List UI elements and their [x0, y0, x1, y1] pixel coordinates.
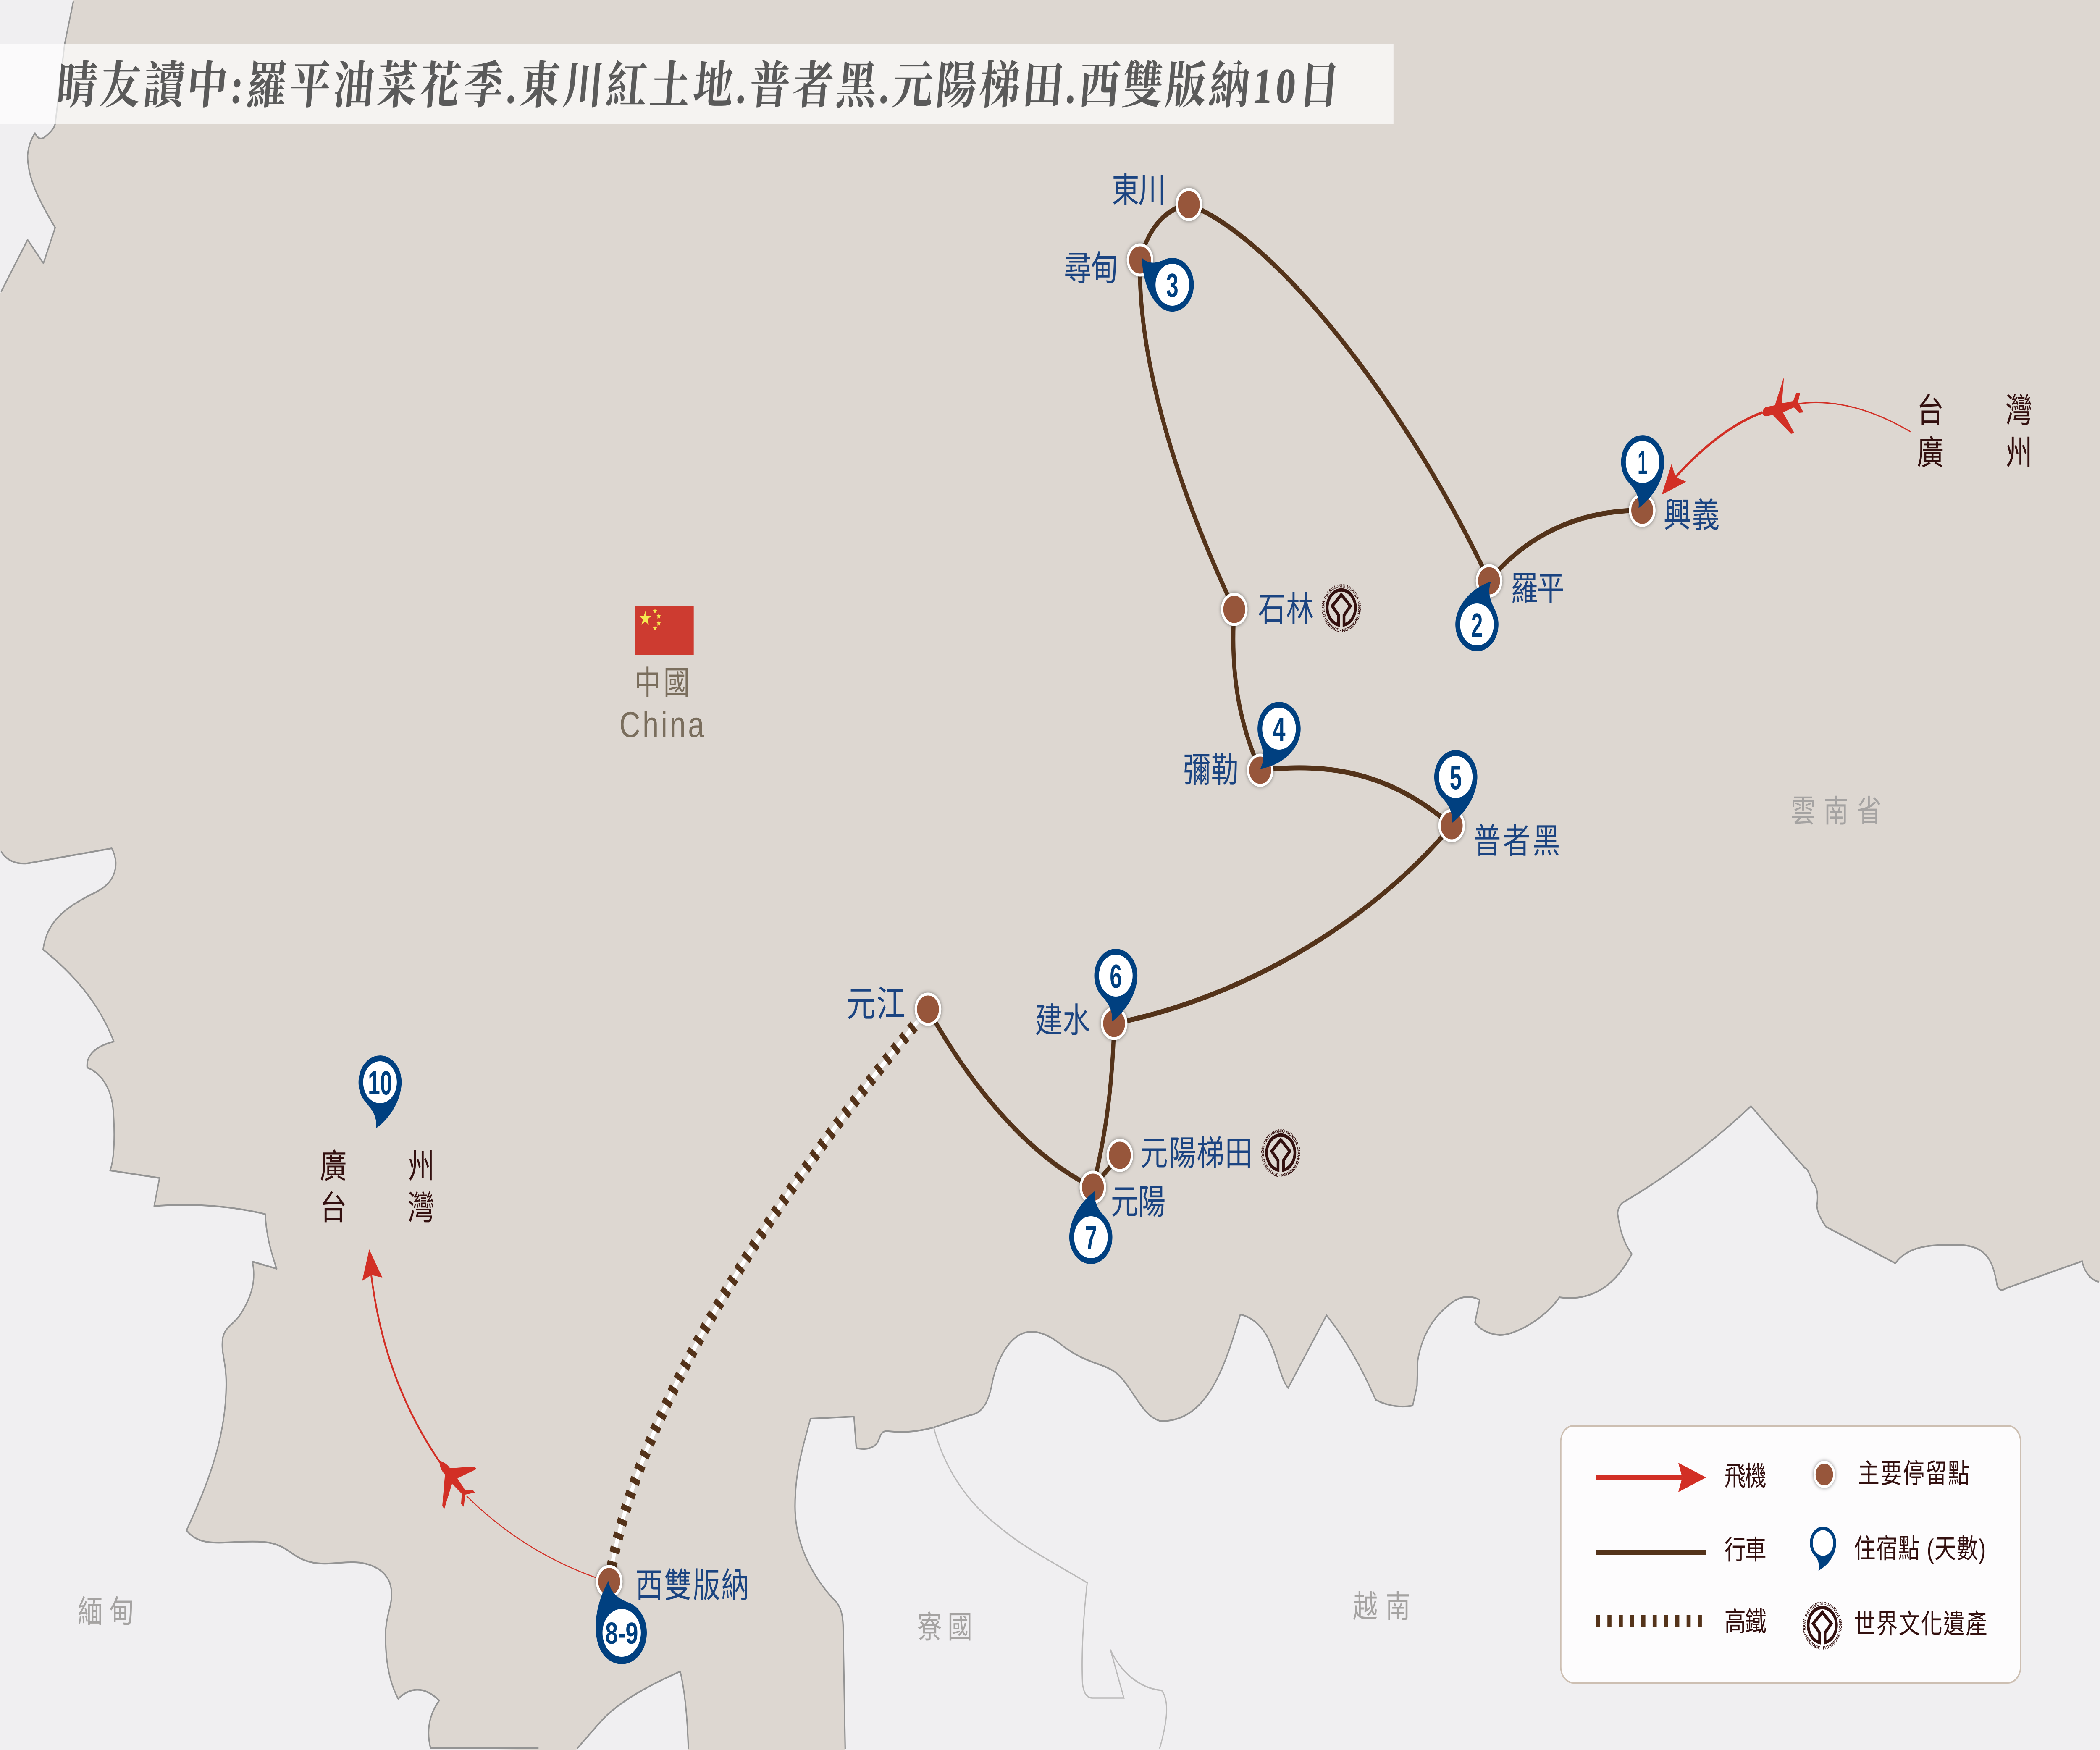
label: Stone Forest: 石林 — [1258, 590, 1314, 629]
label: China in Chinese: 中國 — [635, 664, 690, 701]
label: Mile: 彌勒 — [1183, 751, 1239, 790]
panel: legend — [1561, 1426, 2021, 1683]
icon: world heritage, Yuanyang Terraces: PATRIMONIO MUNDIAL — [1263, 1128, 1299, 1154]
pin: night 2: 2 — [1471, 606, 1483, 644]
country label: Laos: 寮國 — [917, 1610, 972, 1645]
label: return Taiwan: 台灣 — [320, 1189, 435, 1227]
pin: night 6 — [1095, 949, 1137, 1022]
pin: night 1: 1 — [1638, 444, 1648, 482]
pin: night 4 — [1244, 693, 1307, 782]
legend: stop node — [1814, 1462, 1834, 1487]
label: Xishuangbanna: 西雙版納 — [635, 1566, 749, 1605]
country label: Yunnan: 雲南省 — [1791, 794, 1882, 829]
label: Yuanyang: 元陽 — [1111, 1183, 1166, 1221]
legend text: flight: 飛機 — [1725, 1462, 1767, 1491]
route: high-speed rail line — [609, 1009, 928, 1582]
pin: night 5 — [1434, 750, 1478, 823]
pin: night 10 — [359, 1055, 402, 1128]
pin: night 7: 7 — [1085, 1219, 1097, 1257]
label: China in English: China — [620, 704, 704, 745]
pin: night 3: 3 — [1166, 267, 1179, 304]
pin: night 3 — [1129, 239, 1202, 321]
label: Dongchuan: 東川 — [1112, 171, 1166, 210]
legend: world heritage icon: WORLD HERITAGE · PATRIMOINE MONDIAL — [1802, 1618, 1843, 1651]
icon: flag stars — [640, 609, 661, 631]
legend: rail bars — [1596, 1615, 1702, 1627]
title: 晴友讀中:羅平油菜花季.東川紅土地.普者黑.元陽梯田.西雙版納10日 — [55, 58, 1342, 114]
icon: world heritage, Stone Forest — [1320, 583, 1362, 633]
label: Yuanyang Terraces: 元陽梯田 — [1140, 1134, 1252, 1173]
country label: Myanmar: 緬甸 — [78, 1595, 134, 1629]
pin: night 1 — [1621, 435, 1664, 508]
legend text: main stop: 主要停留點 — [1858, 1459, 1969, 1489]
country label: Vietnam: 越南 — [1353, 1590, 1410, 1624]
legend: drive line — [1596, 1550, 1706, 1555]
legend: flight arrow — [1596, 1463, 1706, 1492]
legend: overnight pin — [1810, 1527, 1836, 1571]
label: departure Guangzhou: 廣州 — [1917, 434, 2032, 472]
route: driving lines — [928, 205, 1642, 1187]
icon: arrow head — [362, 1249, 382, 1281]
legend text: drive: 行車 — [1725, 1536, 1767, 1565]
label: Luoping: 羅平 — [1511, 569, 1564, 608]
legend text: world heritage: 世界文化遺產 — [1854, 1610, 1987, 1639]
label: return Guangzhou: 廣州 — [320, 1148, 435, 1186]
pin: night 10: 10 — [368, 1064, 392, 1102]
pin: nights 8-9 — [581, 1571, 655, 1674]
legend text: rail: 高鐵 — [1725, 1608, 1767, 1637]
legend: world heritage icon: PATRIMONIO MUNDIAL — [1804, 1601, 1840, 1627]
icon: plane — [440, 1461, 477, 1509]
flight: Guangzhou / Taiwan to Xingyi — [1662, 377, 1911, 495]
pin: night 6: 6 — [1110, 958, 1122, 995]
icon: world heritage, Stone Forest: PATRIMONIO MUNDIAL — [1323, 583, 1360, 609]
label: departure Taiwan: 台灣 — [1917, 392, 2032, 430]
icon: world heritage, Stone Forest: WORLD HERITAGE · PATRIMOINE MONDIAL — [1320, 600, 1362, 633]
label: Jianshui: 建水 — [1035, 1001, 1090, 1040]
legend: world heritage icon — [1802, 1601, 1843, 1651]
flight: Xishuangbanna to Guangzhou / Taiwan — [362, 1249, 603, 1580]
icon: world heritage, Yuanyang Terraces — [1260, 1128, 1302, 1178]
pin: night 5: 5 — [1450, 759, 1462, 797]
border: Laos and Vietnam — [934, 1427, 1167, 1749]
pin: nights 8-9: 8-9 — [605, 1616, 638, 1650]
legend text: overnight: 住宿點 (天數) — [1854, 1535, 1986, 1564]
label: Xingyi: 興義 — [1664, 496, 1719, 535]
label: Xundian: 尋甸 — [1064, 249, 1118, 288]
icon: plane — [1762, 377, 1803, 434]
icon: world heritage, Yuanyang Terraces: WORLD HERITAGE · PATRIMOINE MONDIAL — [1260, 1145, 1302, 1178]
stop nodes — [597, 189, 1654, 1597]
title banner — [0, 44, 1394, 124]
pin: night 4: 4 — [1273, 711, 1286, 748]
label: Puzhehei: 普者黑 — [1473, 822, 1560, 861]
pin: night 7 — [1069, 1191, 1113, 1264]
label: Yuanjiang: 元江 — [847, 984, 906, 1024]
icon: arrow head — [1662, 464, 1686, 495]
China flag and label — [620, 606, 704, 745]
pin: night 2 — [1450, 573, 1508, 658]
